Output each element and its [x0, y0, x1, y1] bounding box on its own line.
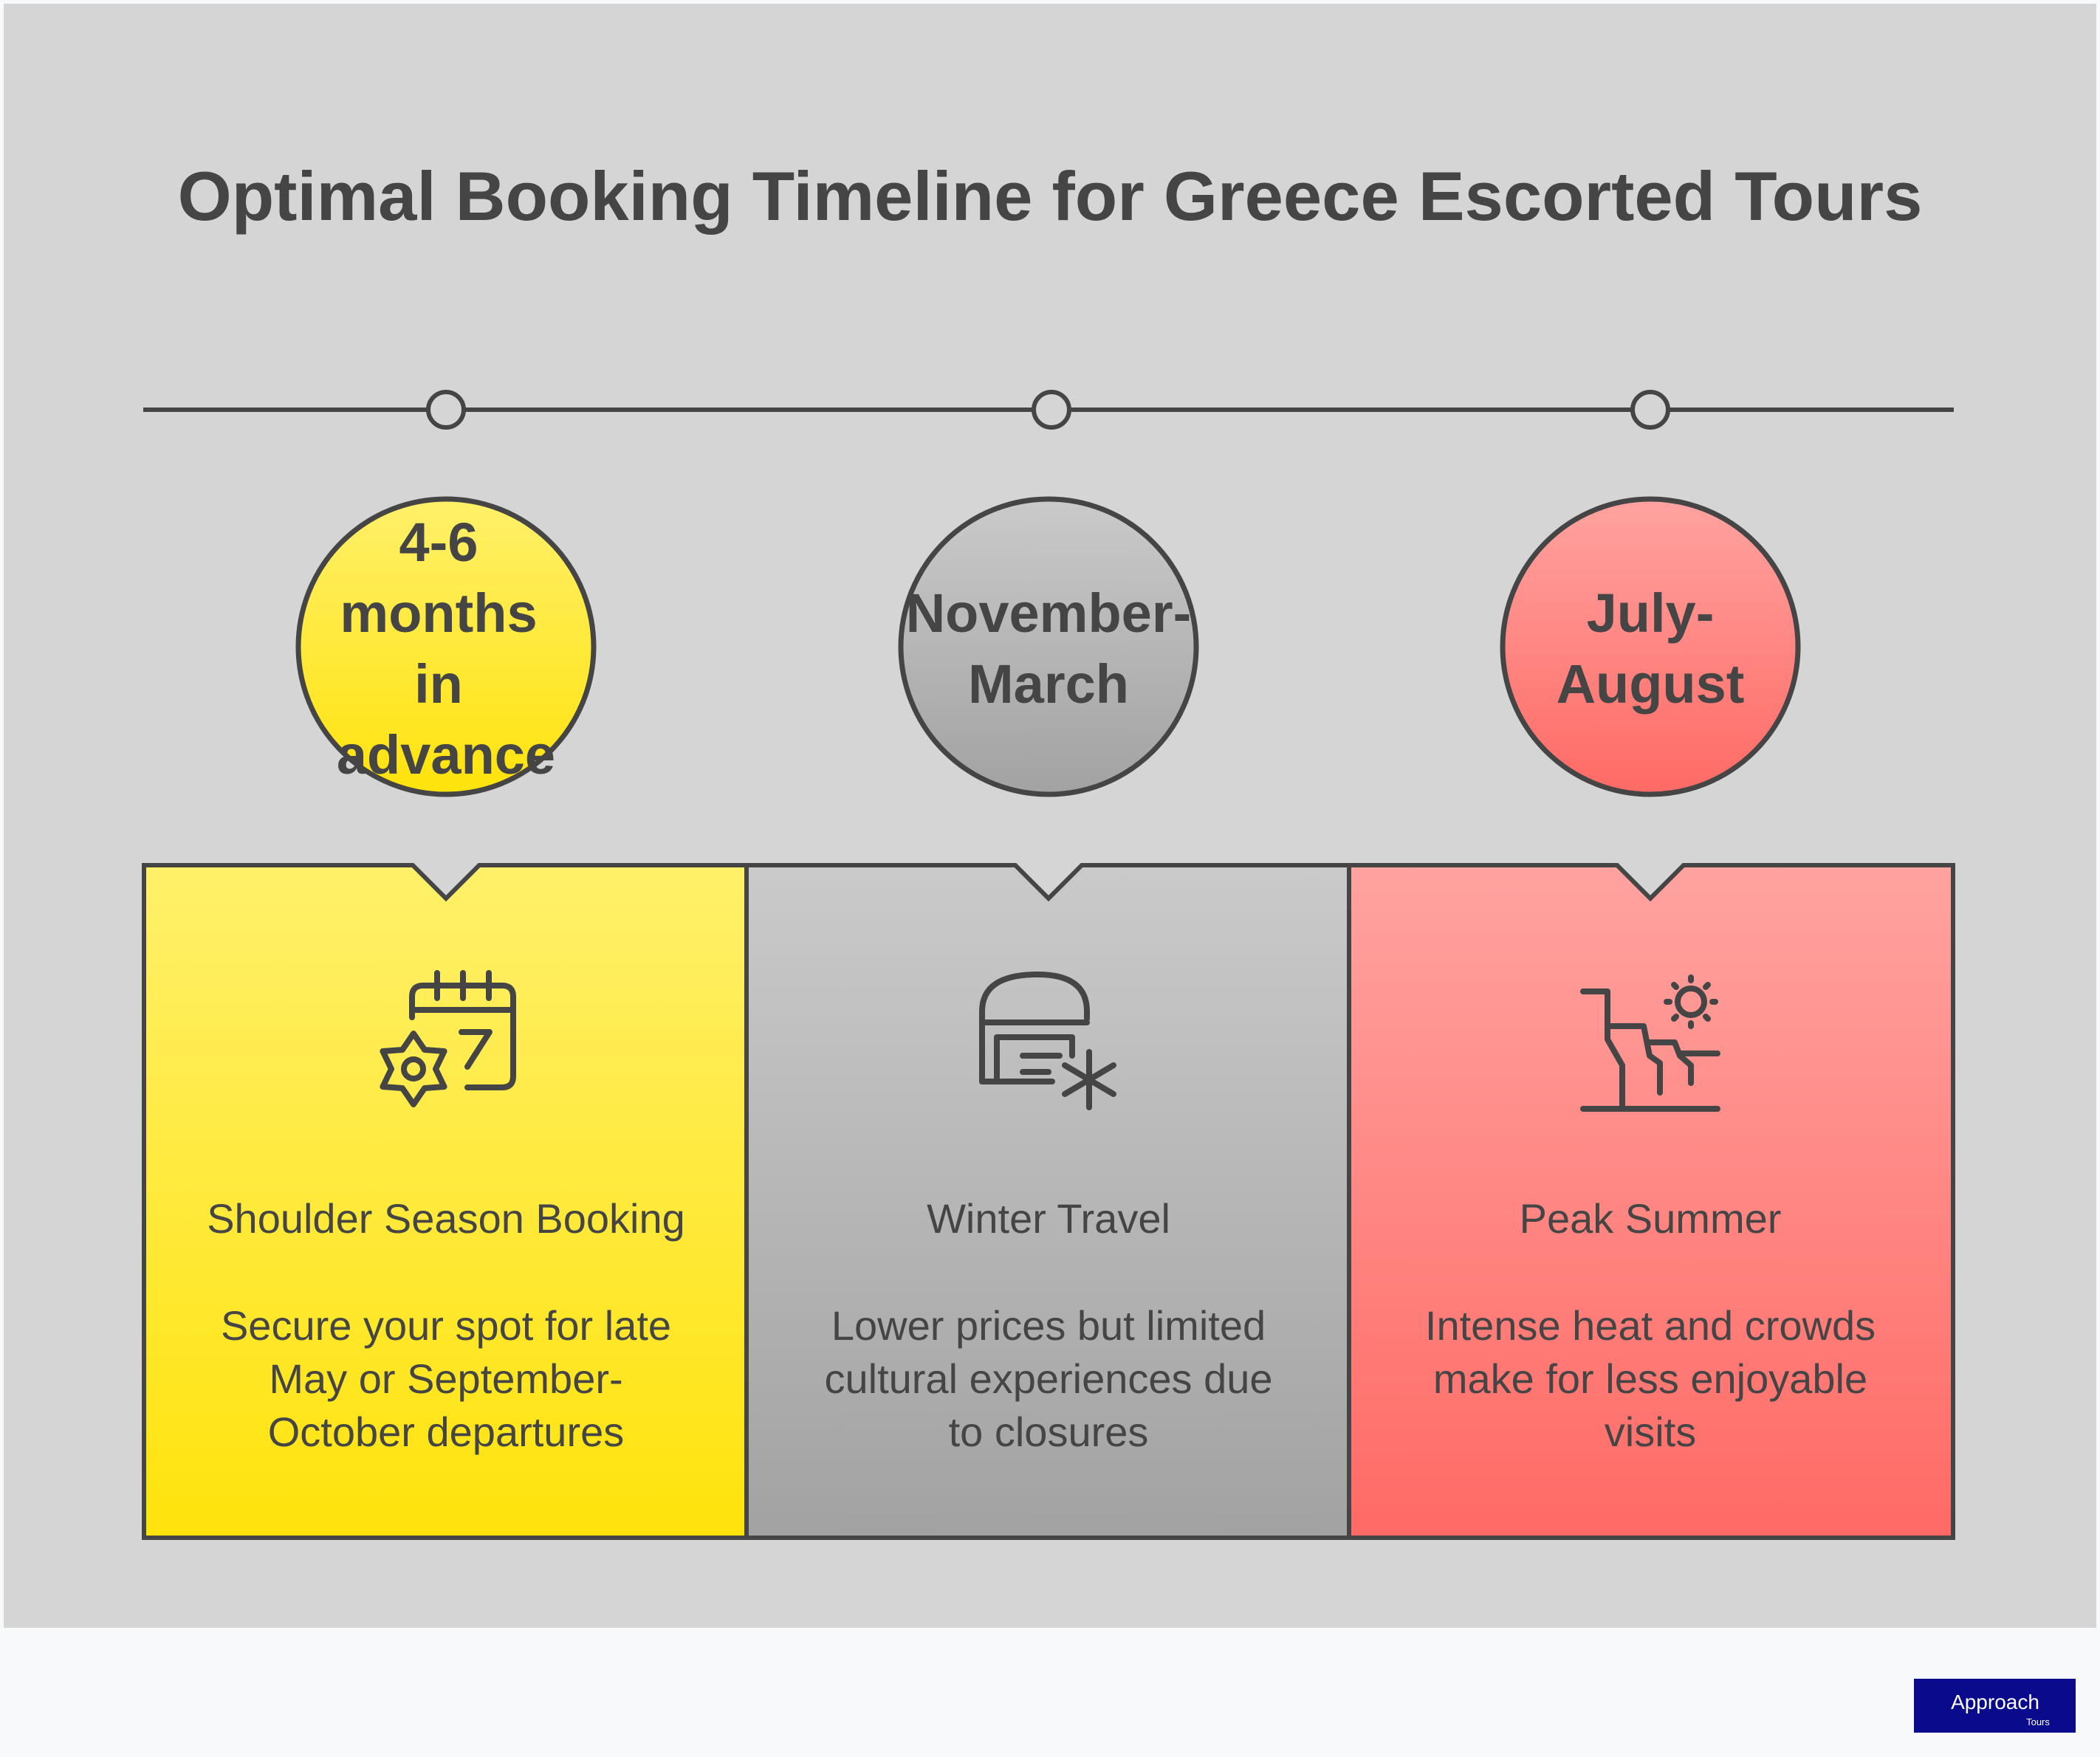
circle: July-August	[1503, 499, 1798, 794]
text: description: Intense heat and crowds	[1425, 1302, 1876, 1349]
text: description: Secure your spot for late	[221, 1302, 671, 1349]
heading: Winter Travel: Winter Travel	[927, 1195, 1170, 1242]
heading: Shoulder Season Booking: Shoulder Season Booking	[207, 1195, 685, 1242]
circle: 4-6 months: 4-6	[399, 512, 478, 573]
heading: Peak Summer: Peak Summer	[1520, 1195, 1781, 1242]
circle: July-August: August	[1557, 653, 1744, 715]
text: description: October departures	[268, 1409, 624, 1455]
circle: November-March: March	[968, 653, 1129, 715]
text: description: May or September-	[269, 1355, 623, 1402]
circle: July-August: July-	[1587, 582, 1714, 644]
text: description: visits	[1605, 1409, 1696, 1455]
title: Optimal Booking Timeline for Greece Escorted Tours	[178, 157, 1922, 235]
logo: Tours	[2026, 1716, 2050, 1727]
circle: 4-6 months: months	[340, 582, 538, 644]
panel: shoulder season	[144, 865, 747, 1538]
icon: cliff sun	[1583, 977, 1718, 1109]
text: description: to closures	[949, 1409, 1148, 1455]
circle: 4-6 months: advance	[337, 724, 555, 785]
icon: calendar gear	[382, 973, 513, 1104]
logo	[1914, 1679, 2076, 1733]
circle: November-March: November-	[906, 582, 1191, 644]
text: description: Lower prices but limited	[831, 1302, 1266, 1349]
circle: 4-6 months: in	[414, 653, 463, 715]
panel: winter travel	[747, 865, 1349, 1538]
panel: peak summer	[1349, 865, 1953, 1538]
circle: November-March	[901, 499, 1196, 794]
timeline	[143, 392, 1954, 427]
text: description: cultural experiences due	[824, 1355, 1273, 1402]
logo: Approach	[1951, 1691, 2039, 1713]
circle: 4-6 months	[298, 499, 594, 794]
icon: snow garage	[982, 974, 1114, 1107]
text: description: make for less enjoyable	[1433, 1355, 1867, 1402]
